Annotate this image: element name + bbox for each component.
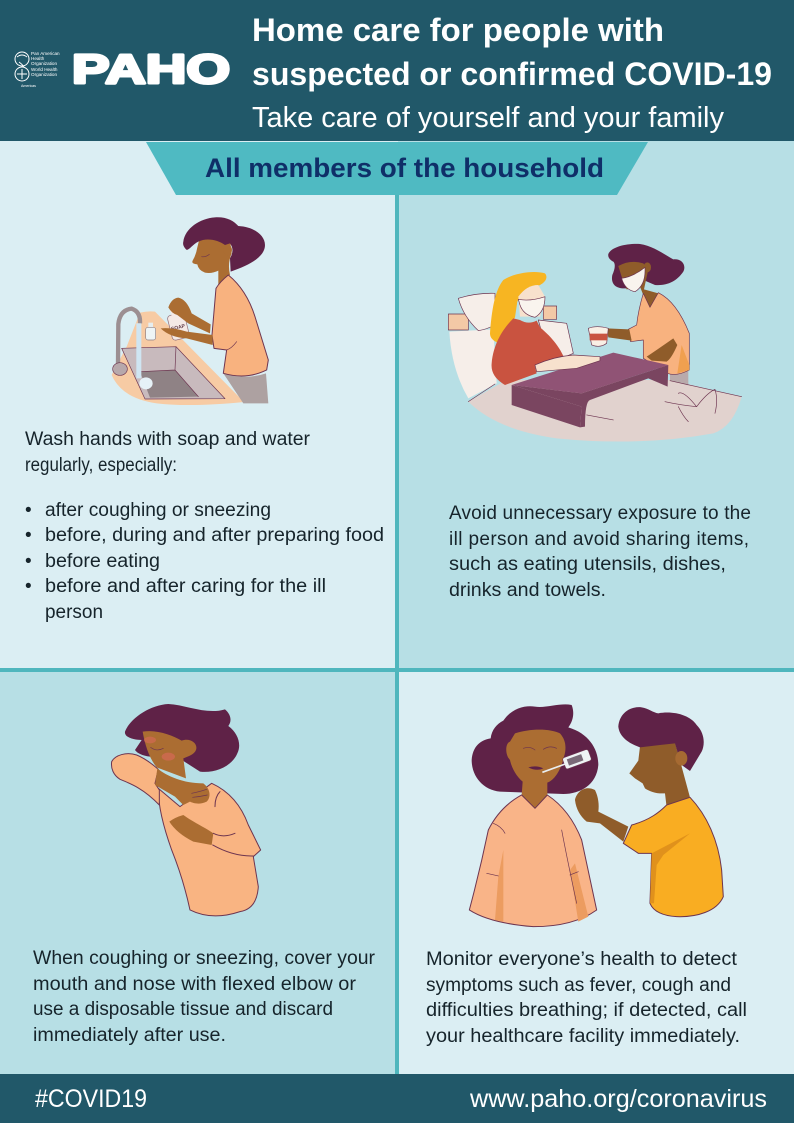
text: hand washing advice: person	[45, 602, 103, 623]
panel: monitor health background	[398, 671, 794, 1075]
text: avoid exposure advice	[449, 503, 751, 601]
logo: PAHO: Organization	[31, 72, 57, 77]
logo: PAHO: PAHO	[72, 46, 230, 92]
text: coughing advice	[33, 948, 376, 1046]
title	[252, 12, 772, 92]
hashtag: #COVID19	[35, 1085, 147, 1113]
text: hand washing advice: regularly, especially:	[25, 455, 177, 476]
text: monitor health advice: your healthcare facility immediately.	[426, 1026, 740, 1047]
panel: hand washing background	[0, 141, 396, 669]
text: hand washing advice: •	[25, 576, 32, 597]
logo: PAHO: Americas	[21, 84, 36, 88]
text: hand washing advice: before eating	[45, 551, 160, 572]
logo: PAHO: World Health	[31, 67, 58, 72]
icon: man taking sick woman's temperature with thermometer	[469, 704, 723, 927]
logo: PAHO: Pan American	[31, 51, 60, 56]
text: monitor health advice: Monitor everyone’s health to detect	[426, 949, 738, 970]
website: www.paho.org/coronavirus	[469, 1085, 767, 1113]
text: coughing advice: mouth and nose with flexed elbow or	[33, 974, 357, 995]
text: coughing advice: immediately after use.	[33, 1025, 226, 1046]
text: avoid exposure advice: such as eating utensils, dishes,	[449, 554, 726, 575]
logo: PAHO: Organization	[31, 61, 57, 66]
banner: All members of the household: All members of the household	[205, 153, 604, 183]
logo: PAHO	[15, 46, 230, 92]
text: hand washing advice: before and after caring for the ill	[45, 576, 326, 597]
text: monitor health advice: difficulties breathing; if detected, call	[426, 1000, 747, 1021]
text: coughing advice: use a disposable tissue and discard	[33, 999, 333, 1020]
title: suspected or confirmed COVID-19	[252, 56, 772, 92]
text: hand washing advice: Wash hands with soap and water	[25, 429, 311, 450]
text: hand washing advice: •	[25, 500, 32, 521]
text: monitor health advice: symptoms such as fever, cough and	[426, 975, 731, 996]
panel: avoid exposure background	[398, 141, 794, 669]
banner: All members of the household	[146, 142, 648, 195]
logo: PAHO: Health	[31, 56, 45, 61]
subtitle: Take care of yourself and your family	[252, 102, 725, 134]
text: monitor health advice	[426, 949, 747, 1047]
icon: caregiver in mask bringing cup to ill person in bed	[448, 244, 742, 442]
icon: person washing hands at sink: SOAP	[171, 323, 186, 333]
text: avoid exposure advice: drinks and towels.	[449, 580, 606, 601]
text: avoid exposure advice: Avoid unnecessary exposure to the	[449, 503, 751, 524]
icon: person washing hands at sink	[112, 217, 268, 405]
header band	[0, 0, 794, 141]
panel: coughing background	[0, 671, 396, 1075]
text: hand washing advice	[25, 429, 384, 623]
text: avoid exposure advice: ill person and avoid sharing items,	[449, 529, 749, 550]
footer band	[0, 1074, 794, 1123]
title: Home care for people with	[252, 12, 664, 48]
text: hand washing advice: after coughing or sneezing	[45, 500, 271, 521]
text: hand washing advice: before, during and after preparing food	[45, 525, 384, 546]
text: hand washing advice: •	[25, 525, 32, 546]
text: coughing advice: When coughing or sneezing, cover your	[33, 948, 376, 969]
icon: person coughing into flexed elbow	[111, 704, 261, 916]
text: hand washing advice: •	[25, 551, 32, 572]
